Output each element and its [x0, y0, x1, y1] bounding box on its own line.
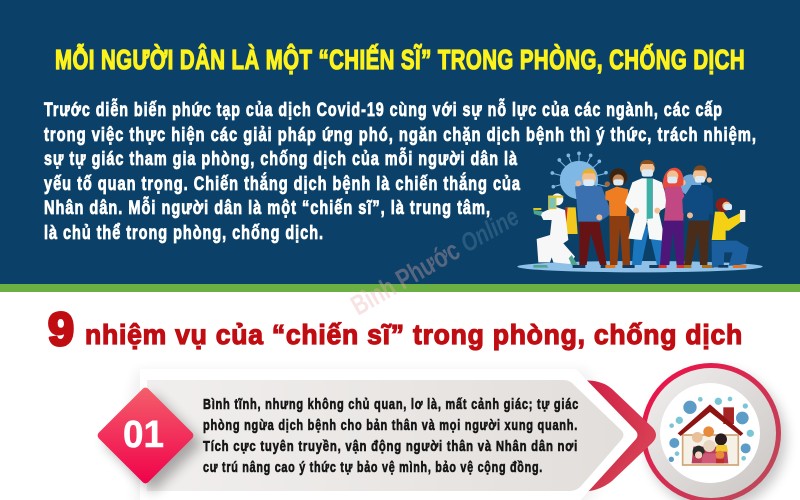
icon: task illustration circle — [641, 363, 786, 500]
task text block: Bình tĩnh, nhưng không chủ quan, lơ là, mất cảnh giác; tự giác — [203, 396, 579, 413]
white panel outline — [140, 369, 638, 500]
watermark: Online — [455, 201, 524, 258]
icon: family — [692, 426, 728, 463]
heading number 9: 9 — [48, 303, 74, 355]
ground ellipse — [517, 261, 763, 272]
green divider band — [0, 284, 800, 292]
task text block — [203, 396, 579, 476]
person: protective suit sprayer — [533, 193, 578, 268]
person: kneeling man in yellow — [712, 198, 749, 268]
person: man in blue sweater — [573, 169, 612, 268]
red chevron behind panel — [570, 380, 656, 492]
grey panel — [147, 380, 624, 491]
panel: task 01 — [96, 363, 786, 500]
diamond shadow — [104, 394, 202, 492]
watermark: Bình Phước — [346, 234, 465, 321]
number diamond 01 — [96, 386, 195, 485]
person: man in navy sweater — [682, 165, 714, 268]
heading: nhiệm vụ của “chiến sĩ” trong phòng, chống dịch — [85, 319, 743, 350]
person: doctor in white coat — [623, 160, 669, 268]
intro text block — [44, 97, 757, 244]
panel shadow — [125, 370, 640, 500]
icon: viruses around house — [669, 401, 751, 462]
intro text block: Nhân dân. Mỗi người dân là một “chiến sĩ”, là trung tâm, — [44, 195, 491, 219]
icon: house — [683, 435, 738, 465]
task text block: phòng ngừa dịch bệnh cho bản thân và mọi người xung quanh. — [203, 417, 578, 434]
person: woman in orange top — [605, 168, 630, 268]
illustration: group of people in masks — [517, 152, 763, 272]
task text block: cư trú nâng cao ý thức tự bảo vệ mình, bảo vệ cộng đồng. — [203, 459, 543, 476]
intro text block: sự tự giác tham gia phòng, chống dịch của mỗi người dân là — [44, 146, 518, 170]
intro text block: là chủ thể trong phòng, chống dịch. — [44, 222, 324, 244]
number diamond 01: 01 — [123, 414, 164, 456]
icon: small virus right — [680, 174, 701, 196]
person: woman in pink top — [659, 168, 687, 268]
task text block: Tích cực tuyên truyền, vận động người thân và Nhân dân nơi — [203, 438, 578, 455]
icon: large virus behind people — [551, 152, 607, 199]
intro text block: yếu tố quan trọng. Chiến thắng dịch bệnh là chiến thắng của — [44, 171, 521, 195]
panel: navy header background — [0, 0, 800, 284]
